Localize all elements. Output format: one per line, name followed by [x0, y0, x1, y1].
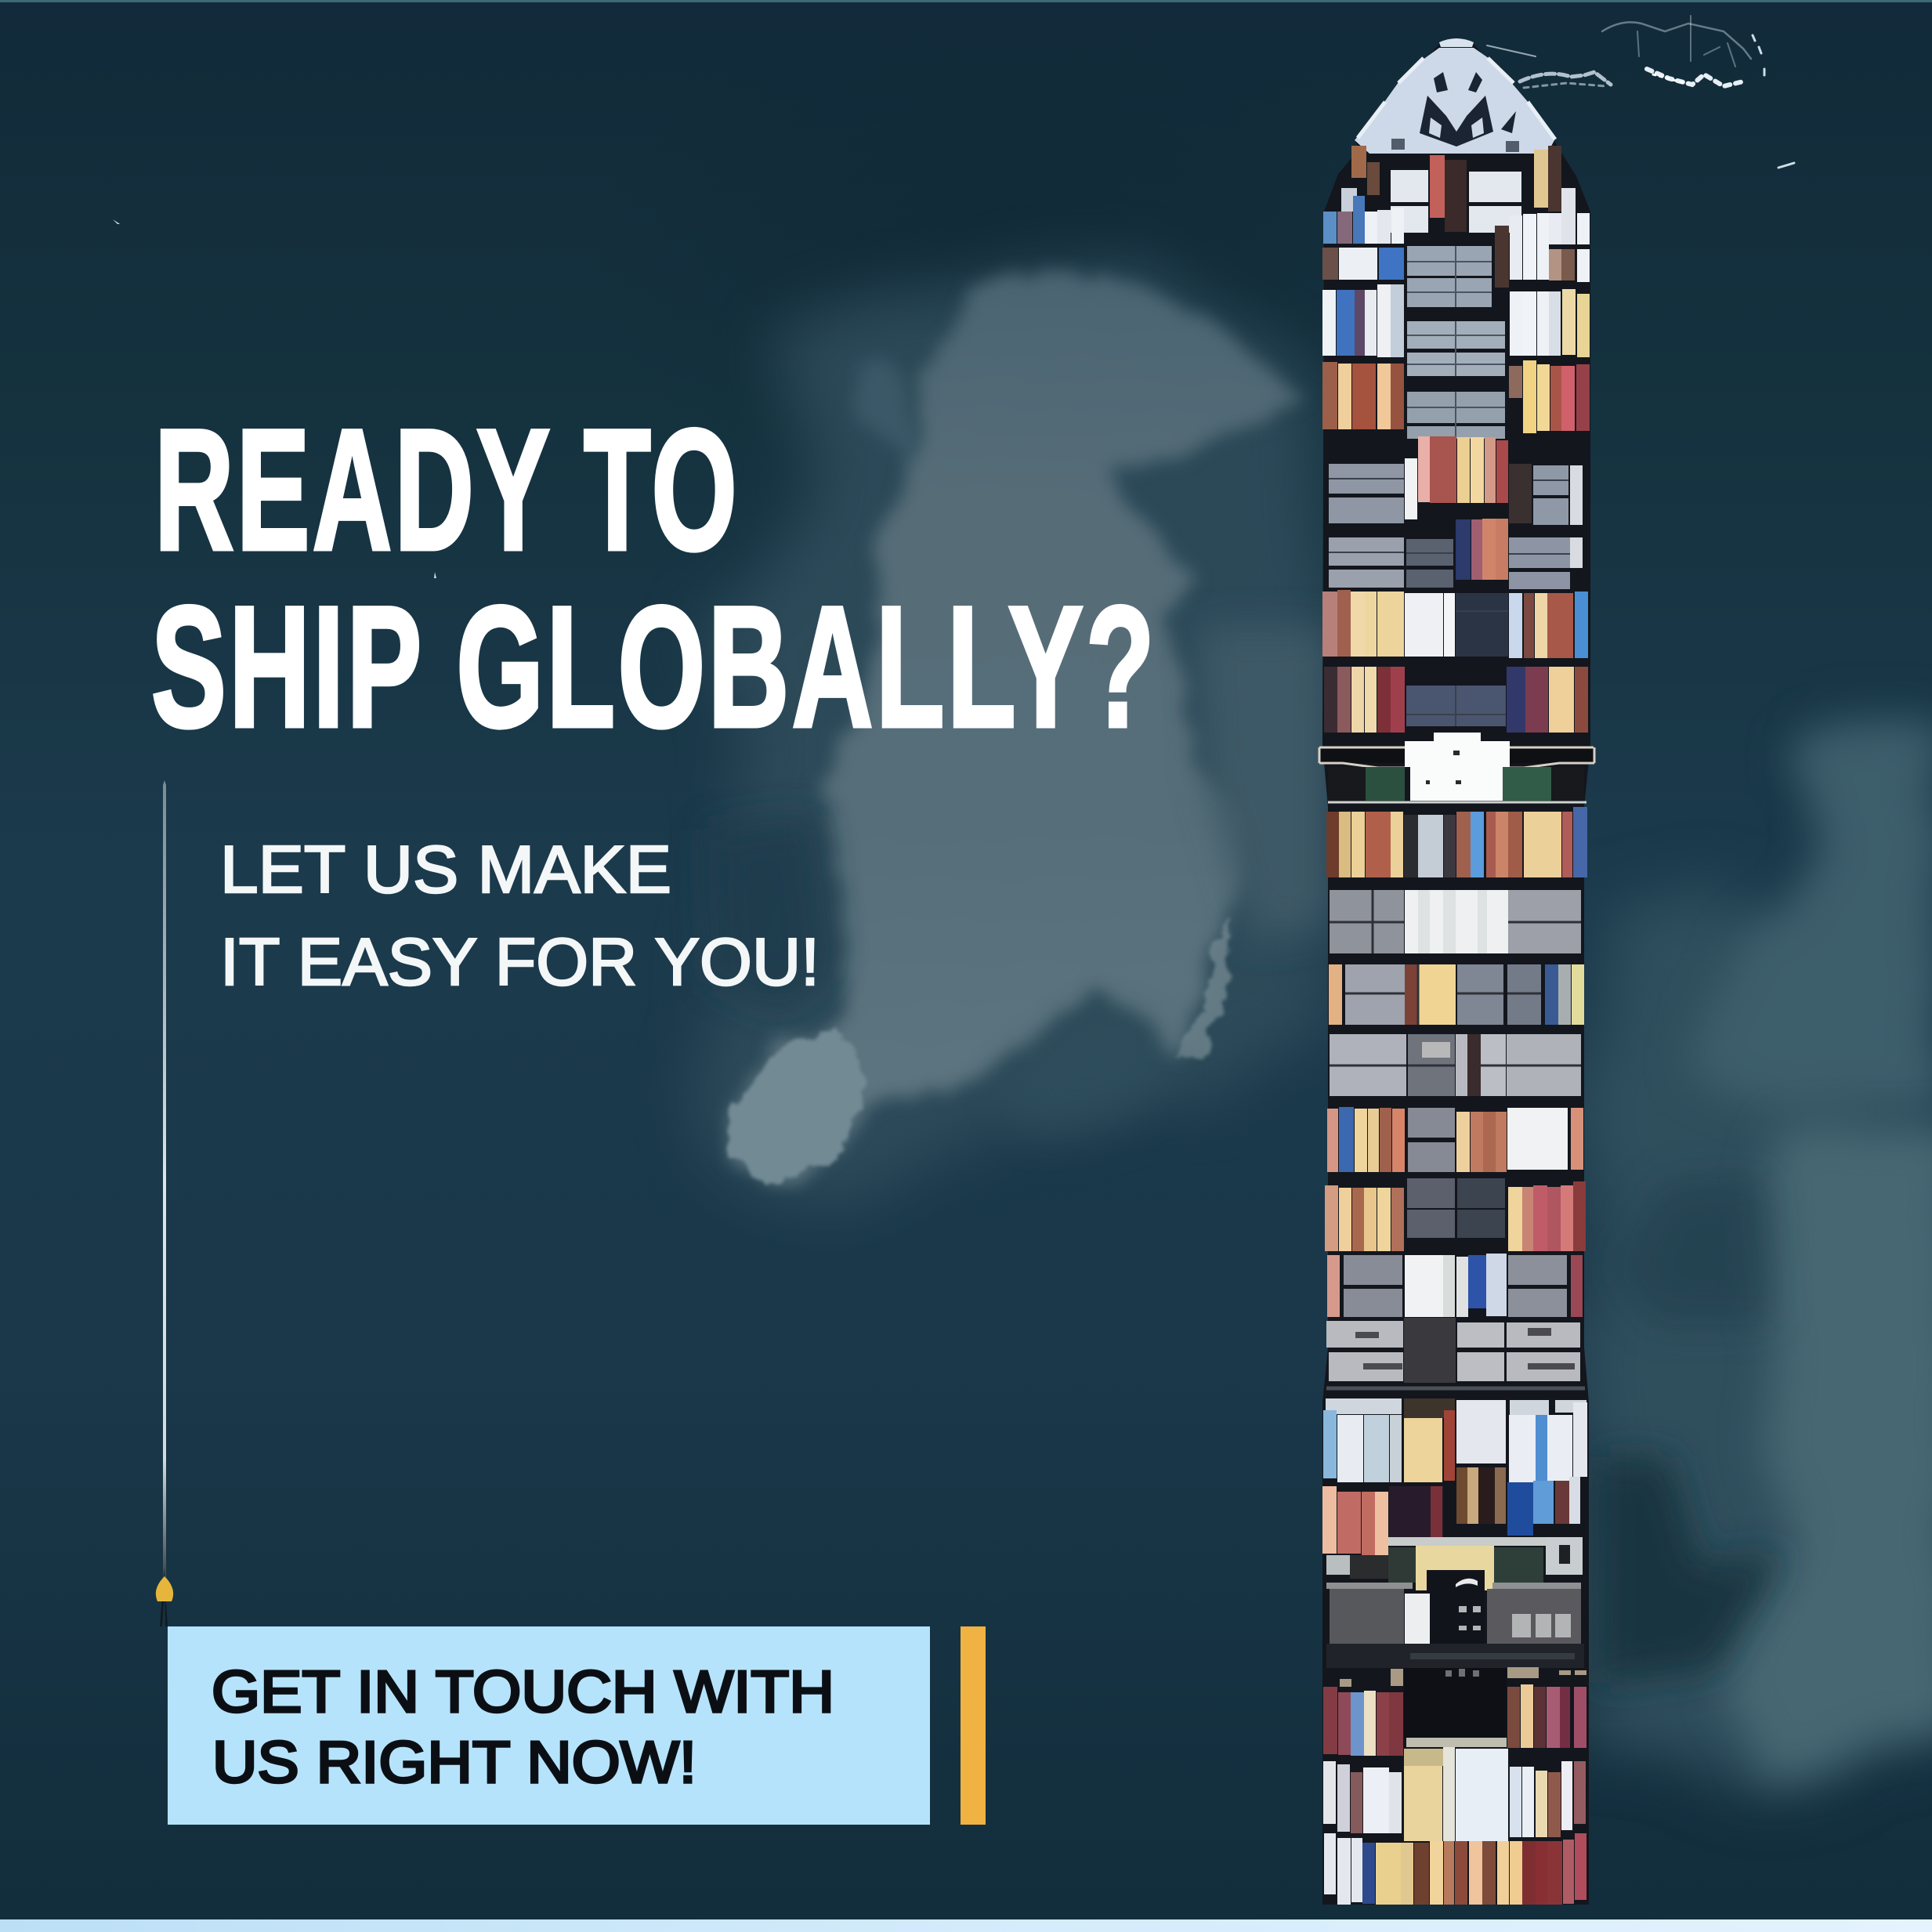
coastal foam	[1175, 917, 1230, 1058]
central cloud body	[729, 268, 1304, 1187]
midship crane gantry	[1319, 733, 1594, 802]
soft haze around the central cloud	[705, 266, 1332, 1207]
reef patch beside the cloud	[851, 349, 924, 466]
stern containers	[1323, 1667, 1586, 1905]
clouds over the water	[705, 266, 1932, 1794]
medium haze between cloud and ship	[1199, 627, 1328, 940]
dark water left of the cloud's lower part	[708, 815, 830, 1011]
call to action text	[212, 1659, 834, 1795]
mid deck containers	[1325, 807, 1587, 1251]
heading: READY TO	[154, 393, 740, 586]
vertical rod with buoy	[156, 780, 173, 1626]
lower right cloud	[1726, 1124, 1932, 1783]
call to action text: GET IN TOUCH WITH	[212, 1659, 834, 1724]
call to action box	[168, 1626, 930, 1825]
ship bow deck	[1355, 38, 1555, 154]
aft deck containers	[1322, 1254, 1587, 1555]
heading	[151, 393, 1157, 763]
container ship seen from above	[1319, 16, 1794, 1905]
forward deck containers	[1322, 146, 1590, 439]
bottom light strip	[0, 1919, 1932, 1932]
call to action text: US RIGHT NOW!	[212, 1729, 696, 1795]
heading: SHIP GLOBALLY?	[151, 570, 1157, 763]
aft superstructure	[1326, 1537, 1584, 1738]
mid-forward deck containers	[1322, 436, 1588, 733]
bright island tip	[729, 1028, 870, 1187]
subheading: LET US MAKE	[220, 833, 671, 907]
subheading	[220, 833, 819, 1000]
wake behind the bow	[1487, 16, 1794, 168]
subheading: IT EASY FOR YOU!	[220, 925, 819, 1000]
orange accent bar	[961, 1626, 986, 1825]
hull shadow	[1322, 44, 1590, 1905]
textured shallows under the ridge	[989, 1011, 1175, 1136]
dark pocket right of the ship	[1598, 1457, 1786, 1684]
upper right cloud	[1684, 721, 1932, 1113]
